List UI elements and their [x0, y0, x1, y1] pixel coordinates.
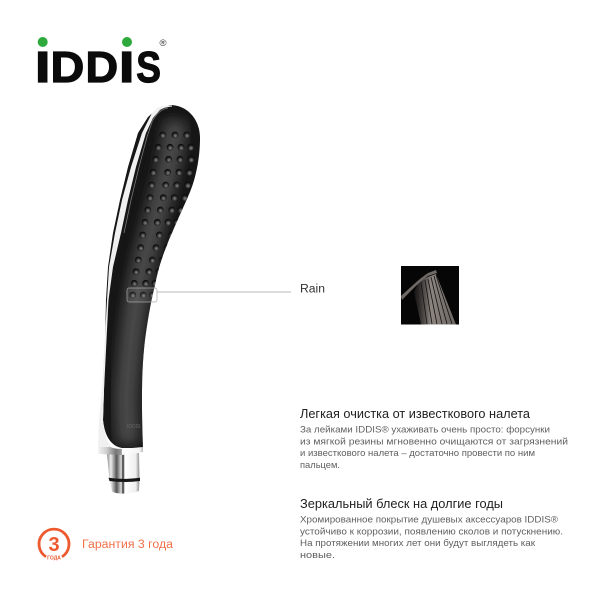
body: из мягкой резины мгновенно очищаются от загрязнений — [300, 436, 568, 448]
faint brand mark on handle: IDDIS — [127, 424, 141, 430]
spray nozzles — [129, 132, 194, 298]
icon: 3 year ring: ГОДА — [47, 556, 61, 562]
warranty label: Гарантия 3 года — [82, 539, 174, 551]
body: новые. — [300, 550, 335, 561]
heading: Легкая очистка от известкового налета — [300, 407, 530, 421]
logo: IDDIS — [35, 37, 167, 92]
face highlight — [126, 120, 176, 445]
black body of handle — [103, 105, 200, 448]
logo wordmark: I — [35, 43, 50, 92]
icon: 3 year ring — [39, 529, 69, 562]
body: и известкового налета – достаточно провести по ним — [300, 448, 535, 459]
body: Хромированное покрытие душевых аксессуаров IDDIS® — [300, 515, 558, 526]
logo wordmark: S — [136, 43, 161, 92]
body: устойчиво к коррозии, появлению сколов и потускнению. — [300, 526, 563, 538]
label: Rain: Rain — [300, 284, 325, 296]
logo wordmark: I — [119, 43, 134, 92]
chrome stripe — [98, 105, 172, 448]
text block: easy cleaning — [300, 407, 568, 471]
body: За лейками IDDIS® ухаживать очень просто: форсунки — [300, 425, 550, 436]
product: shower head — [98, 105, 200, 494]
logo registered mark: ® — [160, 38, 166, 49]
logo wordmark: D — [86, 43, 118, 92]
warranty badge — [39, 529, 174, 562]
water streams — [414, 274, 456, 324]
text block: mirror shine — [300, 497, 563, 561]
spray head silhouette — [401, 270, 437, 300]
shower head neck — [107, 453, 140, 494]
thumbnail: rain spray photo — [401, 266, 459, 324]
inner grey rim line — [124, 108, 168, 233]
body: На протяжении многих лет они будут выглядеть как — [300, 538, 536, 549]
logo wordmark — [35, 43, 161, 92]
logo wordmark: D — [50, 43, 84, 92]
icon: 3 year ring: 3 — [48, 534, 60, 556]
logo green dots — [38, 37, 132, 47]
chrome collar — [98, 447, 143, 455]
body — [300, 515, 563, 561]
callout: nozzle highlight box and leader line — [127, 288, 291, 302]
body: пальцем. — [300, 460, 340, 471]
heading: Зеркальный блеск на долгие годы — [300, 497, 503, 511]
body — [300, 425, 568, 471]
